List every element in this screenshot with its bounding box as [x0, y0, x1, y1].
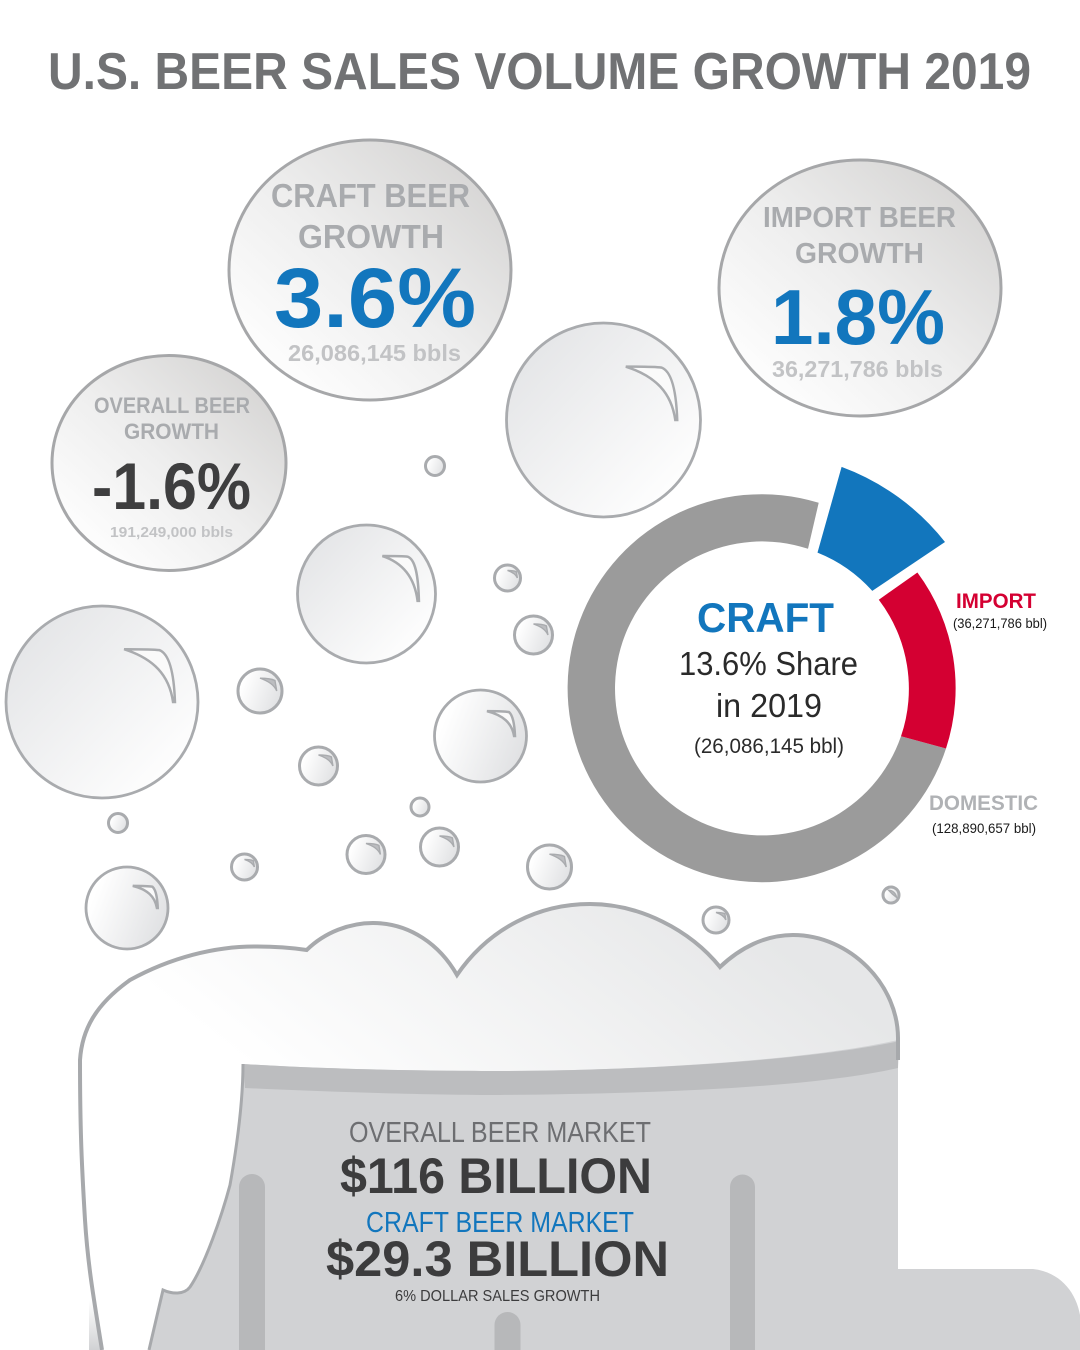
decorative bubbles — [6, 323, 899, 949]
panel: craft beer growth bubble: 3.6% — [274, 251, 476, 345]
market size text block: OVERALL BEER MARKET — [349, 1117, 651, 1149]
mug right pillar — [730, 1174, 755, 1350]
market size text block: $29.3 BILLION — [326, 1231, 669, 1287]
icon: tiny bubble 420,807 — [411, 798, 429, 816]
import segment — [879, 572, 956, 748]
panel: overall beer growth bubble: 191,249,000 bbls — [110, 524, 233, 541]
import label: IMPORT — [956, 590, 1036, 613]
import label: (36,271,786 bbl) — [953, 616, 1047, 631]
donut centre label: CRAFT — [697, 594, 834, 641]
icon: medium bubble centre — [434, 690, 526, 782]
panel: overall beer growth bubble: GROWTH — [124, 419, 219, 444]
mug centre pillar — [494, 1312, 520, 1350]
beer mug illustration — [80, 904, 1080, 1350]
panel: overall beer growth bubble: OVERALL BEER — [94, 393, 250, 418]
panel: import beer growth bubble: GROWTH — [795, 238, 924, 270]
import label — [953, 590, 1047, 631]
icon: small bubble 533,635 — [514, 616, 552, 654]
donut centre label: (26,086,145 bbl) — [694, 735, 844, 758]
icon: tiny bubble 435,466 — [426, 456, 444, 476]
panel: craft beer growth bubble — [229, 140, 511, 400]
mug left pillar — [239, 1174, 265, 1350]
handle inner outline — [149, 1064, 243, 1350]
donut centre label: in 2019 — [716, 687, 822, 724]
icon: tiny bubble 118,823 — [108, 814, 128, 832]
icon: large bubble upper centre — [506, 323, 700, 517]
foam band shadow — [243, 1040, 899, 1095]
icon: small bubble 549,867 — [528, 845, 572, 889]
icon: small bubble 318,766 — [300, 747, 338, 785]
mug body and handle — [149, 1040, 1080, 1350]
panel: craft beer growth bubble: GROWTH — [298, 218, 444, 255]
domestic label: (128,890,657 bbl) — [932, 821, 1036, 836]
donut centre label — [679, 594, 858, 758]
domestic segment — [568, 494, 946, 882]
foam — [80, 904, 898, 1350]
icon: small bubble 716,920 — [703, 907, 729, 933]
domestic label: DOMESTIC — [929, 792, 1038, 815]
craft segment — [818, 467, 945, 591]
icon: large bubble left — [6, 606, 198, 798]
panel: import beer growth bubble: IMPORT BEER — [763, 202, 956, 234]
mug left edge sliver — [89, 1300, 102, 1350]
icon: small bubble 439,847 — [420, 828, 458, 866]
panel: import beer growth bubble: 36,271,786 bbls — [772, 356, 943, 382]
donut chart: market share — [568, 467, 956, 882]
panel: import beer growth bubble: 1.8% — [771, 273, 945, 361]
icon: small bubble 366,854 — [347, 836, 385, 874]
domestic label — [929, 792, 1038, 836]
panel: overall beer growth bubble: -1.6% — [92, 449, 251, 523]
panel: overall beer growth bubble — [52, 356, 286, 570]
foam outline — [80, 904, 898, 1350]
panel: craft beer growth bubble: 26,086,145 bbls — [288, 340, 461, 366]
panel: craft beer growth bubble: CRAFT BEER — [271, 177, 470, 214]
icon: small bubble 260,691 — [238, 669, 282, 713]
market size text block: CRAFT BEER MARKET — [366, 1207, 634, 1239]
market size text block: 6% DOLLAR SALES GROWTH — [395, 1288, 600, 1305]
icon: small bubble 244,867 — [232, 854, 258, 880]
market size text block — [326, 1117, 669, 1305]
icon: small bubble 507,578 — [494, 565, 520, 591]
market size text block: $116 BILLION — [340, 1148, 652, 1204]
donut centre label: 13.6% Share — [679, 645, 858, 682]
icon: medium bubble lower left — [86, 867, 168, 949]
icon: tiny bubble 891,895 — [883, 887, 899, 903]
panel: import beer growth bubble — [719, 160, 1001, 416]
icon: large bubble middle — [298, 525, 436, 663]
